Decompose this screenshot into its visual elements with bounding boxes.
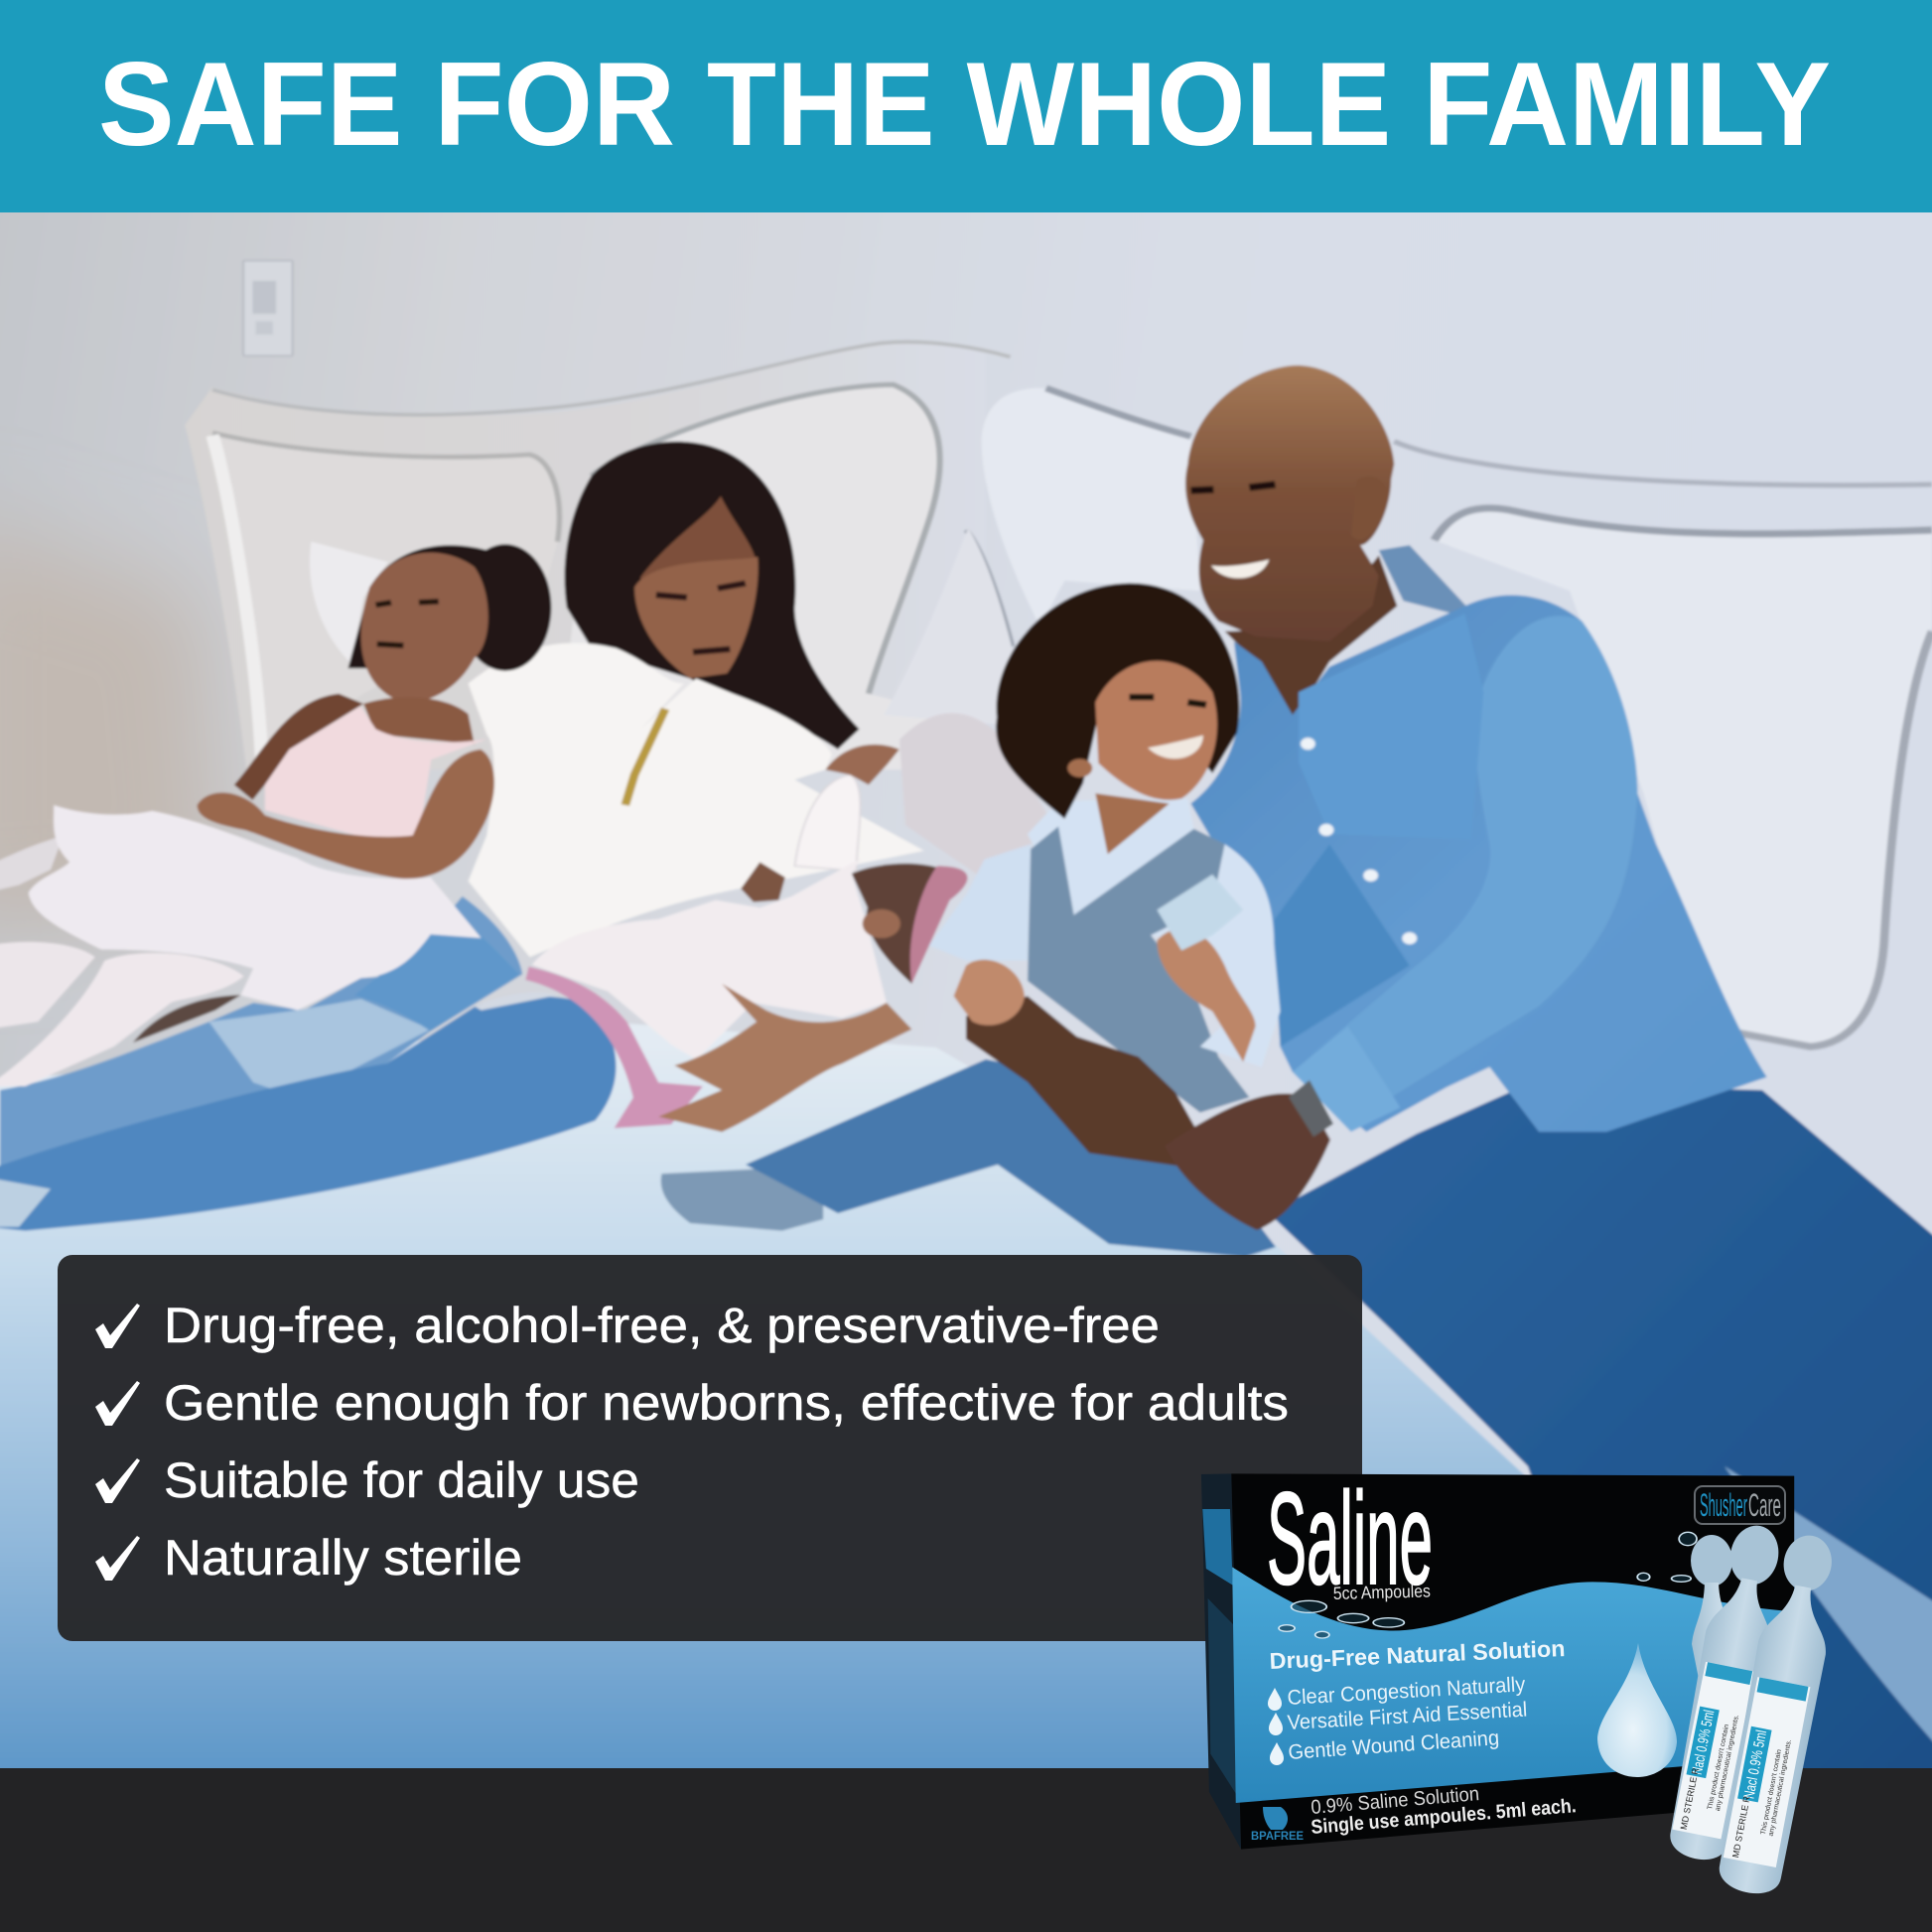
benefits panel xyxy=(58,1255,1362,1641)
small drop icons xyxy=(1268,1688,1284,1765)
ampoule left: any pharmaceutical ingredients. xyxy=(1715,1715,1740,1812)
ampoules size: 5cc Ampoules xyxy=(1333,1581,1431,1603)
sheet showing beyond leg xyxy=(1725,1466,1932,1762)
ampoule left: This product doesn't contain xyxy=(1707,1724,1730,1810)
man forearm xyxy=(966,996,1212,1169)
baby xyxy=(525,859,967,1231)
box logo xyxy=(1695,1486,1785,1524)
man shirt xyxy=(1190,596,1767,1132)
woman face xyxy=(634,557,759,678)
check icon 3 xyxy=(95,1458,140,1503)
woman lower leg jeans xyxy=(0,996,616,1231)
big water drop xyxy=(1597,1643,1677,1777)
baby headband xyxy=(910,866,967,984)
girl eyes and mouth xyxy=(376,602,439,645)
girl tulle skirt xyxy=(29,805,482,1011)
box headline: Drug-Free Natural Solution xyxy=(1269,1635,1566,1674)
man shirt placket xyxy=(1299,614,1483,839)
baby hand xyxy=(825,745,899,785)
check icon 2 xyxy=(95,1381,140,1426)
baby head xyxy=(852,864,950,984)
check icon 4 xyxy=(95,1536,140,1581)
product: saline box and ampoules: Saline xyxy=(1267,1465,1433,1611)
woman hair xyxy=(565,442,860,750)
man eyes xyxy=(1190,484,1275,490)
man cuff xyxy=(1293,1027,1400,1132)
man sleeve xyxy=(1293,616,1637,1097)
woman arm and hand xyxy=(658,984,911,1132)
benefit 3: Suitable for daily use xyxy=(164,1452,639,1508)
boy hair xyxy=(996,583,1239,819)
ampoule right: MD STERILE R xyxy=(1730,1795,1752,1859)
boy toy xyxy=(1157,875,1243,950)
strength line: 0.9% Saline Solution xyxy=(1311,1783,1480,1819)
box feature 1: Clear Congestion Naturally xyxy=(1287,1673,1526,1710)
bottom dark band xyxy=(0,1768,1932,1932)
woman knee highlight xyxy=(208,999,431,1098)
ampoule right: Nacl 0.9% 5ml xyxy=(1740,1728,1770,1800)
boy left hand xyxy=(954,960,1025,1026)
girl right leg xyxy=(0,953,244,1086)
boy neck xyxy=(1095,793,1170,854)
girl neck xyxy=(363,697,475,745)
rear ampoule xyxy=(1691,1535,1746,1704)
right pillow xyxy=(899,713,1053,881)
baby dress xyxy=(532,859,887,1059)
boy eyes xyxy=(1129,697,1206,705)
box body xyxy=(1201,1473,1794,1850)
girl face xyxy=(361,553,488,702)
headboard left half xyxy=(185,342,1011,769)
woman necklace strip xyxy=(625,709,665,805)
bedroom wall xyxy=(0,212,1932,1475)
right padded panel xyxy=(1435,508,1932,1046)
boy left sleeve xyxy=(929,844,1031,961)
bed sheet xyxy=(0,1023,1932,1787)
woman forehead xyxy=(640,496,757,588)
woman and girl legs xyxy=(0,805,616,1231)
man upper body xyxy=(1185,365,1767,1132)
shirt buttons xyxy=(1301,738,1417,944)
benefit 2: Gentle enough for newborns, effective for adults xyxy=(164,1375,1289,1431)
man hand and watch xyxy=(1165,1080,1333,1230)
man head xyxy=(1185,365,1394,641)
benefit 4: Naturally sterile xyxy=(164,1530,522,1586)
wall warm shade xyxy=(0,516,228,933)
boy sock xyxy=(661,1168,823,1231)
girl dress bodice xyxy=(265,706,486,841)
man neck xyxy=(1225,555,1397,723)
woman jacket xyxy=(469,643,924,957)
usage line: Single use ampoules. 5ml each. xyxy=(1311,1795,1578,1839)
boy jeans xyxy=(746,1059,1276,1257)
girl upper body xyxy=(198,544,551,879)
boy vest xyxy=(1028,826,1249,1113)
ampoule right xyxy=(1712,1530,1847,1898)
girl left arm xyxy=(234,694,363,800)
ampoule right: any pharmaceutical ingredients. xyxy=(1768,1739,1793,1837)
box side face xyxy=(1201,1473,1241,1850)
boy right sleeve xyxy=(1151,844,1280,1067)
boy face xyxy=(1095,661,1217,800)
BPA free badge: BPAFREE xyxy=(1251,1829,1304,1843)
woman hand behind baby xyxy=(741,862,785,902)
water bubbles xyxy=(1279,1532,1697,1638)
woman denim wedge xyxy=(354,923,519,1032)
boy smile xyxy=(1148,736,1203,759)
BPA free badge xyxy=(1251,1807,1304,1843)
box feature 2: Versatile First Aid Essential xyxy=(1287,1699,1528,1734)
box feature 3: Gentle Wound Cleaning xyxy=(1288,1726,1500,1764)
man shirt collar xyxy=(1379,545,1466,614)
headboard right half xyxy=(966,388,1932,1046)
boy shirt xyxy=(1028,798,1194,920)
baby pink wrap xyxy=(525,967,703,1128)
woman upper body xyxy=(469,442,924,957)
left pillow xyxy=(310,542,388,663)
title: SAFE FOR THE WHOLE FAMILY xyxy=(98,38,1831,171)
box front face xyxy=(1231,1473,1794,1850)
headboard middle wedge xyxy=(884,528,1023,725)
woman upper leg jeans xyxy=(0,897,522,1170)
girl right arm xyxy=(198,750,494,879)
ampoule left xyxy=(1662,1520,1792,1864)
header banner xyxy=(0,0,1932,212)
center padded panel xyxy=(982,388,1200,626)
check icon 1 xyxy=(95,1304,140,1348)
girl tulle under layer xyxy=(0,836,64,893)
baby arm raised xyxy=(794,774,861,871)
ampoule left: MD STERILE R xyxy=(1679,1767,1701,1831)
product: saline box and ampoules xyxy=(1201,1465,1847,1898)
man smile xyxy=(1211,559,1269,578)
ampoule right: This product doesn't contain xyxy=(1760,1748,1783,1836)
boy right hand xyxy=(1157,928,1256,1062)
light switch xyxy=(243,260,293,355)
gap under knee xyxy=(133,995,240,1042)
box blue wave xyxy=(1232,1567,1794,1803)
man ear xyxy=(1351,477,1387,540)
girl hair xyxy=(459,544,551,671)
benefit 1: Drug-free, alcohol-free, & preservative-free xyxy=(164,1298,1160,1353)
woman eyes and lips xyxy=(656,583,746,652)
man jeans xyxy=(1269,1084,1932,1787)
girl left leg xyxy=(0,942,95,1030)
ampoule left: Nacl 0.9% 5ml xyxy=(1689,1709,1718,1776)
boy upper body xyxy=(929,583,1280,1169)
box logo: Shusher xyxy=(1700,1487,1747,1523)
box logo: Care xyxy=(1748,1487,1781,1523)
